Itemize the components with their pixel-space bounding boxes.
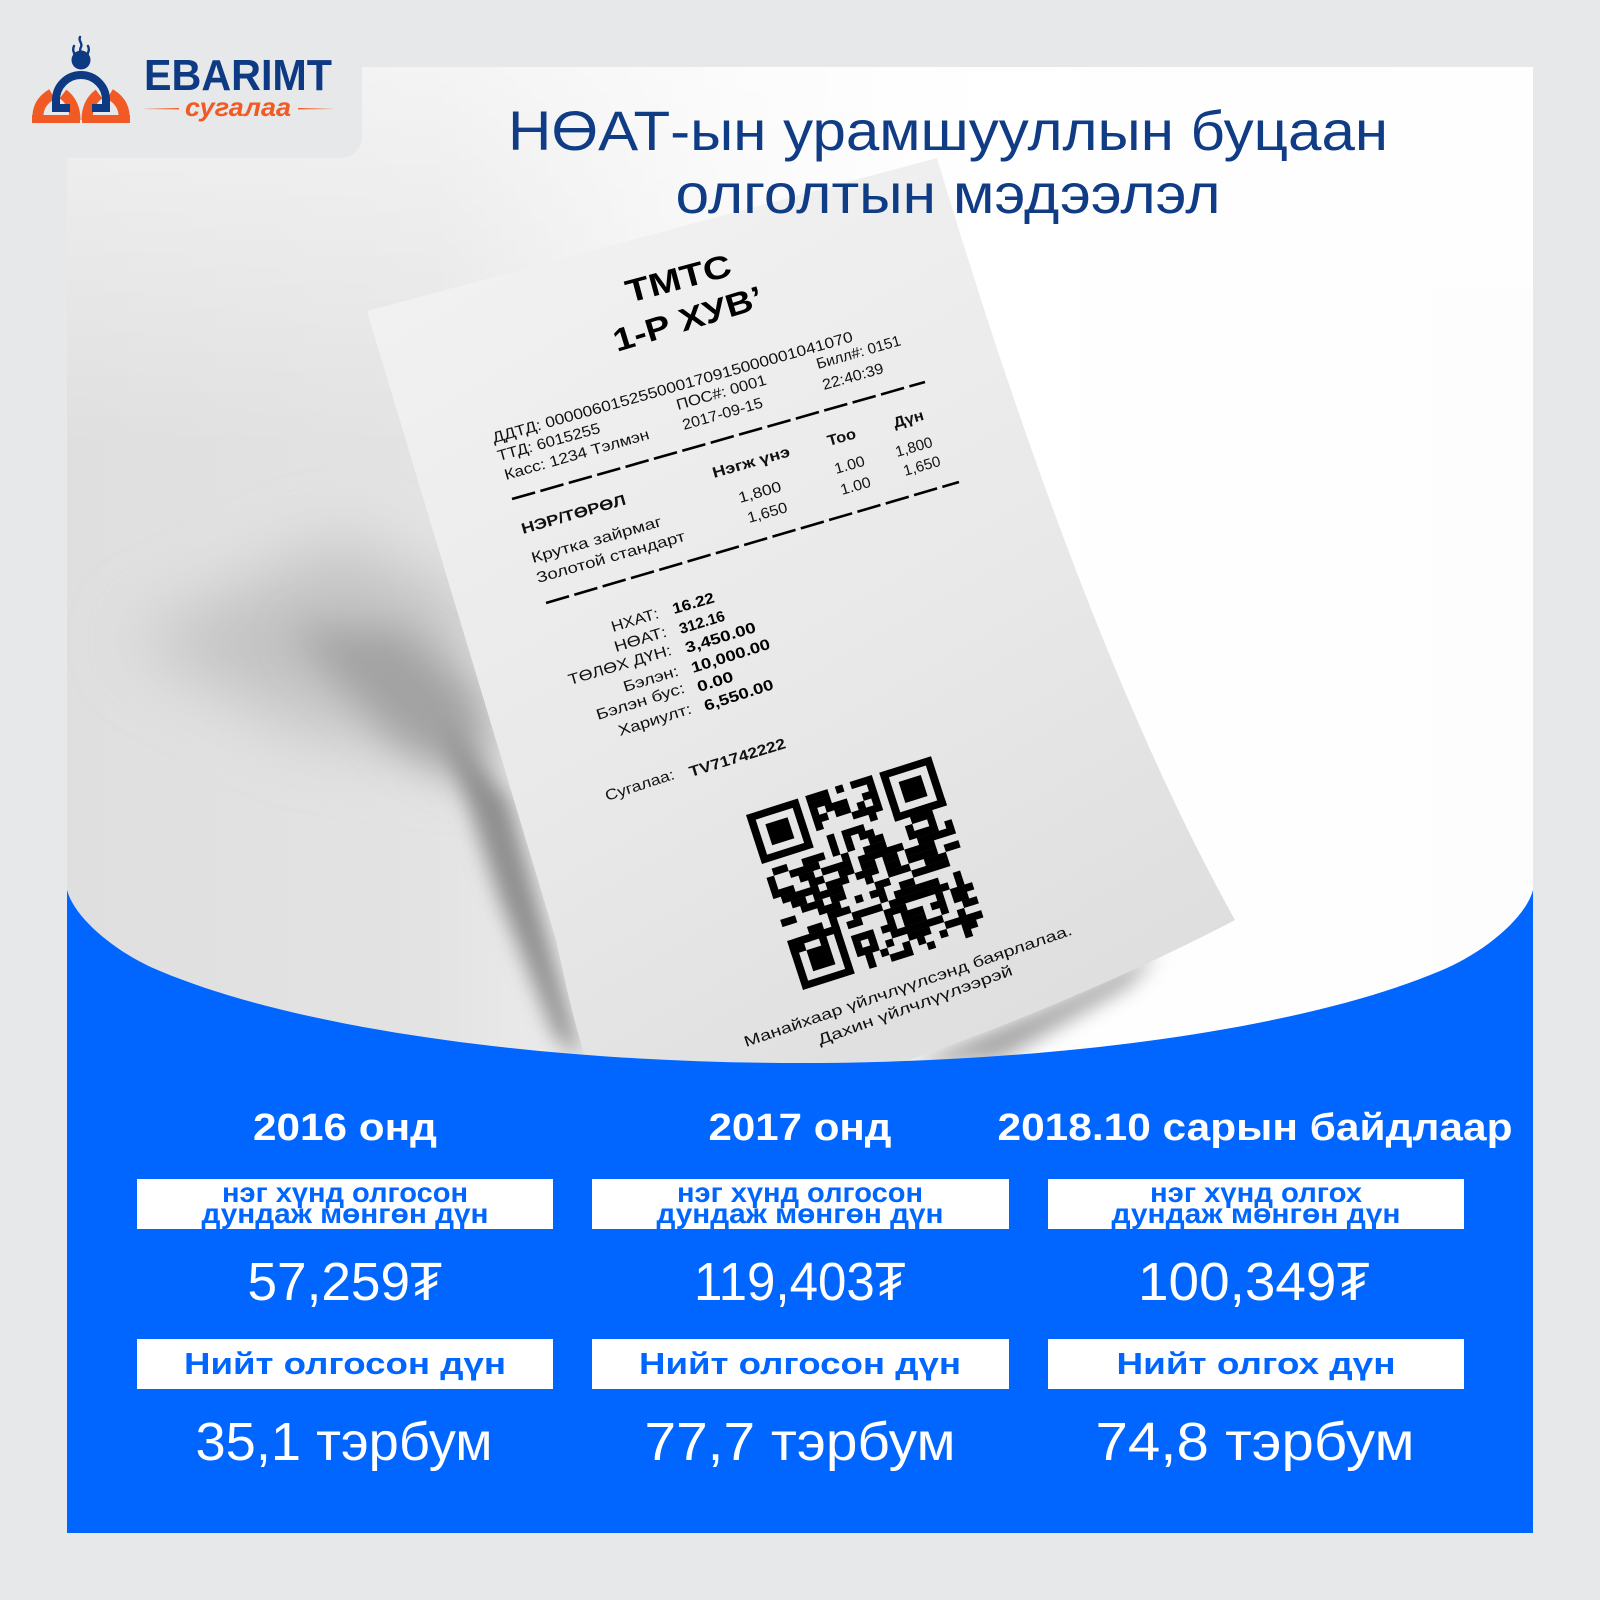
logo backing: [0, 0, 362, 158]
label box: average: [1048, 1177, 1464, 1229]
value: total: 77,7 тэрбум: [644, 1412, 956, 1472]
title: олголтын мэдээлэл: [676, 162, 1220, 225]
receipt totals: Бэлэн бус:: [594, 680, 687, 724]
heading 2016: 2016 онд: [253, 1107, 437, 1149]
value: average: 100,349₮: [1138, 1252, 1370, 1312]
receipt header: 1-Р ХУВ’: [609, 279, 767, 359]
column: 2018.10: [998, 1107, 1512, 1472]
receipt table: Золотой стандарт: [534, 528, 687, 587]
icon: flame emblem: [32, 37, 130, 123]
receipt header: [609, 247, 767, 359]
receipt totals: 3,450.00: [683, 619, 758, 657]
sublabel: сугалаа: [185, 92, 291, 122]
label box: total: Нийт олгосон дүн: [184, 1346, 506, 1381]
receipt totals: ТӨЛӨХ ДҮН:: [566, 642, 674, 689]
label box: total: [592, 1339, 1009, 1389]
label box: average: дундаж мөнгөн дүн: [1112, 1198, 1400, 1229]
receipt footer: [742, 922, 1074, 1051]
receipt totals: НХАТ:: [609, 605, 661, 636]
title: [508, 99, 1388, 225]
label box: total: Нийт олгох дүн: [1116, 1346, 1396, 1381]
receipt table: 1.00: [832, 453, 867, 478]
receipt totals: Хариулт:: [616, 701, 694, 740]
navy arch: [56, 75, 106, 108]
receipt meta info: [490, 329, 903, 484]
receipt footer: Манайхаар үйлчлүүлсэнд баярлалаа.: [742, 922, 1074, 1051]
label box: average: [137, 1177, 553, 1229]
receipt table: 1,650: [745, 499, 790, 527]
receipt header: ТМТС: [621, 247, 735, 310]
receipt footer: Дахин үйлчлүүлээрэй: [816, 962, 1015, 1049]
label box: average: нэг хүнд олгох: [1150, 1177, 1362, 1208]
receipt table: НЭР/ТӨРӨЛ: [519, 492, 628, 538]
label box: average: [592, 1177, 1009, 1229]
panel: photo background with paper shadows: [67, 67, 1533, 1167]
column: 2017: [592, 1107, 1009, 1472]
receipt table: Крутка зайрмаг: [529, 513, 664, 567]
receipt totals: Бэлэн:: [621, 663, 681, 696]
paper sheet: [367, 158, 1235, 1070]
label box: total: Нийт олгосон дүн: [639, 1346, 961, 1381]
label box: average: дундаж мөнгөн дүн: [202, 1198, 488, 1229]
receipt meta info: 22:40:39: [820, 360, 886, 394]
heading 2017: 2017 онд: [708, 1107, 892, 1149]
receipt table: Нэгж үнэ: [710, 443, 792, 482]
lottery code: TV71742222: [687, 735, 788, 781]
value: average: 57,259₮: [248, 1252, 442, 1312]
label box: average: нэг хүнд олгосон: [677, 1177, 923, 1208]
receipt meta info: ДДТД: 000006015255000170915000001041070: [490, 329, 855, 447]
value: average: 119,403₮: [694, 1252, 906, 1312]
receipt totals: 10,000.00: [689, 636, 772, 677]
receipt totals: 16.22: [670, 590, 716, 618]
orange domes: [38, 94, 124, 120]
QR code: [747, 760, 987, 986]
lottery code: [603, 735, 788, 805]
receipt meta info: ПОС#: 0001: [674, 372, 768, 414]
receipt table: 1.00: [838, 474, 873, 499]
receipt table: 1,800: [736, 478, 783, 507]
receipt meta info: Билл#: 0151: [814, 333, 903, 373]
receipt table: [519, 407, 943, 587]
value: total: 74,8 тэрбум: [1096, 1412, 1414, 1472]
heading 2018: 2018.10 сарын байдлаар: [998, 1107, 1512, 1149]
logo: EBARIMT сугалаа: [32, 37, 333, 123]
receipt totals: 312.16: [677, 608, 727, 638]
blue data panel: [67, 890, 1533, 1533]
label box: total: [137, 1339, 553, 1389]
receipt meta info: ТТД: 6015255: [496, 420, 602, 465]
receipt dashed rules: [512, 382, 959, 603]
receipt table: Дүн: [891, 407, 926, 432]
wordmark: EBARIMT: [144, 51, 332, 100]
lottery code: Сугалаа:: [603, 766, 677, 805]
title: НӨАТ-ын урамшууллын буцаан: [508, 99, 1388, 162]
receipt meta info: Касс: 1234 Тэлмэн: [502, 426, 651, 484]
value: total: 35,1 тэрбум: [196, 1412, 492, 1472]
flame: [72, 37, 90, 70]
receipt totals: НӨАТ:: [612, 624, 669, 656]
receipt table: 1,650: [901, 453, 943, 480]
receipt totals: 6,550.00: [702, 676, 776, 715]
label box: average: дундаж мөнгөн дүн: [656, 1198, 944, 1229]
receipt paper: [367, 158, 1235, 1070]
label box: total: [1048, 1339, 1464, 1389]
receipt totals: [566, 590, 776, 740]
receipt meta info: 2017-09-15: [680, 395, 765, 434]
column: 2016: [137, 1107, 553, 1472]
receipt table: 1,800: [893, 434, 935, 461]
receipt table: Too: [825, 426, 858, 450]
label box: average: нэг хүнд олгосон: [222, 1177, 468, 1208]
receipt totals: 0.00: [695, 668, 735, 696]
